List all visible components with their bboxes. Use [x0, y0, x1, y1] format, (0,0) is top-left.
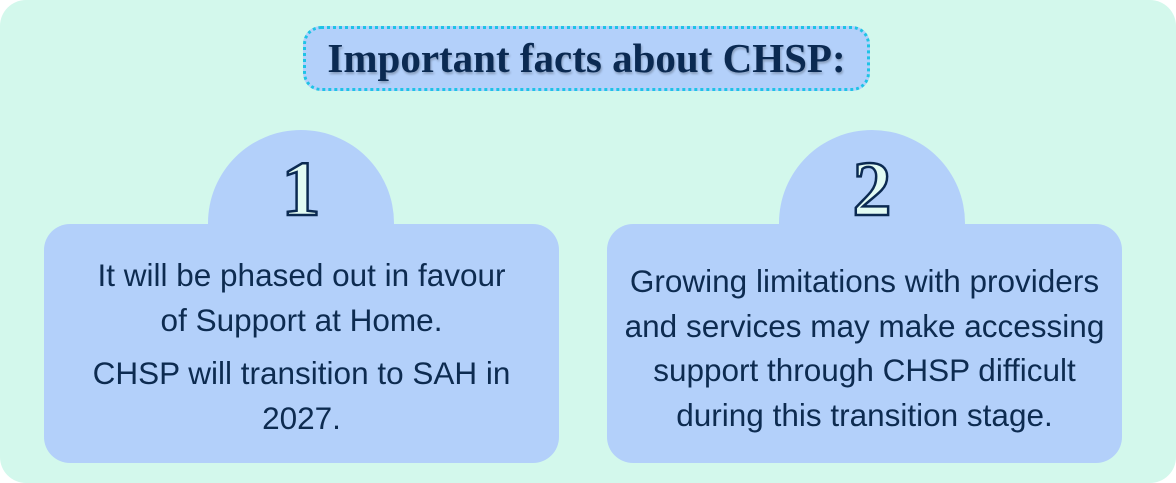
text: fact 1: CHSP will transition to SAH in: [93, 355, 510, 391]
tab: fact 2 number: 2: [852, 145, 892, 232]
tab: fact 1 number: [208, 130, 394, 260]
tab: fact 1 number: 1: [282, 145, 320, 232]
text: fact 2: [625, 263, 1104, 432]
text: fact 1: 2027.: [262, 400, 341, 436]
panel: fact 1: [44, 224, 559, 463]
text: fact 2: Growing limitations with providers: [630, 263, 1099, 299]
text: fact 2: and services may make accessing: [625, 308, 1104, 344]
tab: fact 2 number: [779, 130, 965, 260]
text: fact 2: support through CHSP difficult: [653, 352, 1076, 388]
title: Important facts about CHSP:: [327, 35, 846, 81]
text: fact 1: of Support at Home.: [161, 302, 442, 338]
text: fact 1: [93, 257, 510, 436]
text: fact 2: during this transition stage.: [676, 396, 1053, 432]
panel: fact 2: [607, 224, 1122, 463]
text: fact 1: It will be phased out in favour: [98, 257, 506, 293]
title: [303, 26, 870, 91]
